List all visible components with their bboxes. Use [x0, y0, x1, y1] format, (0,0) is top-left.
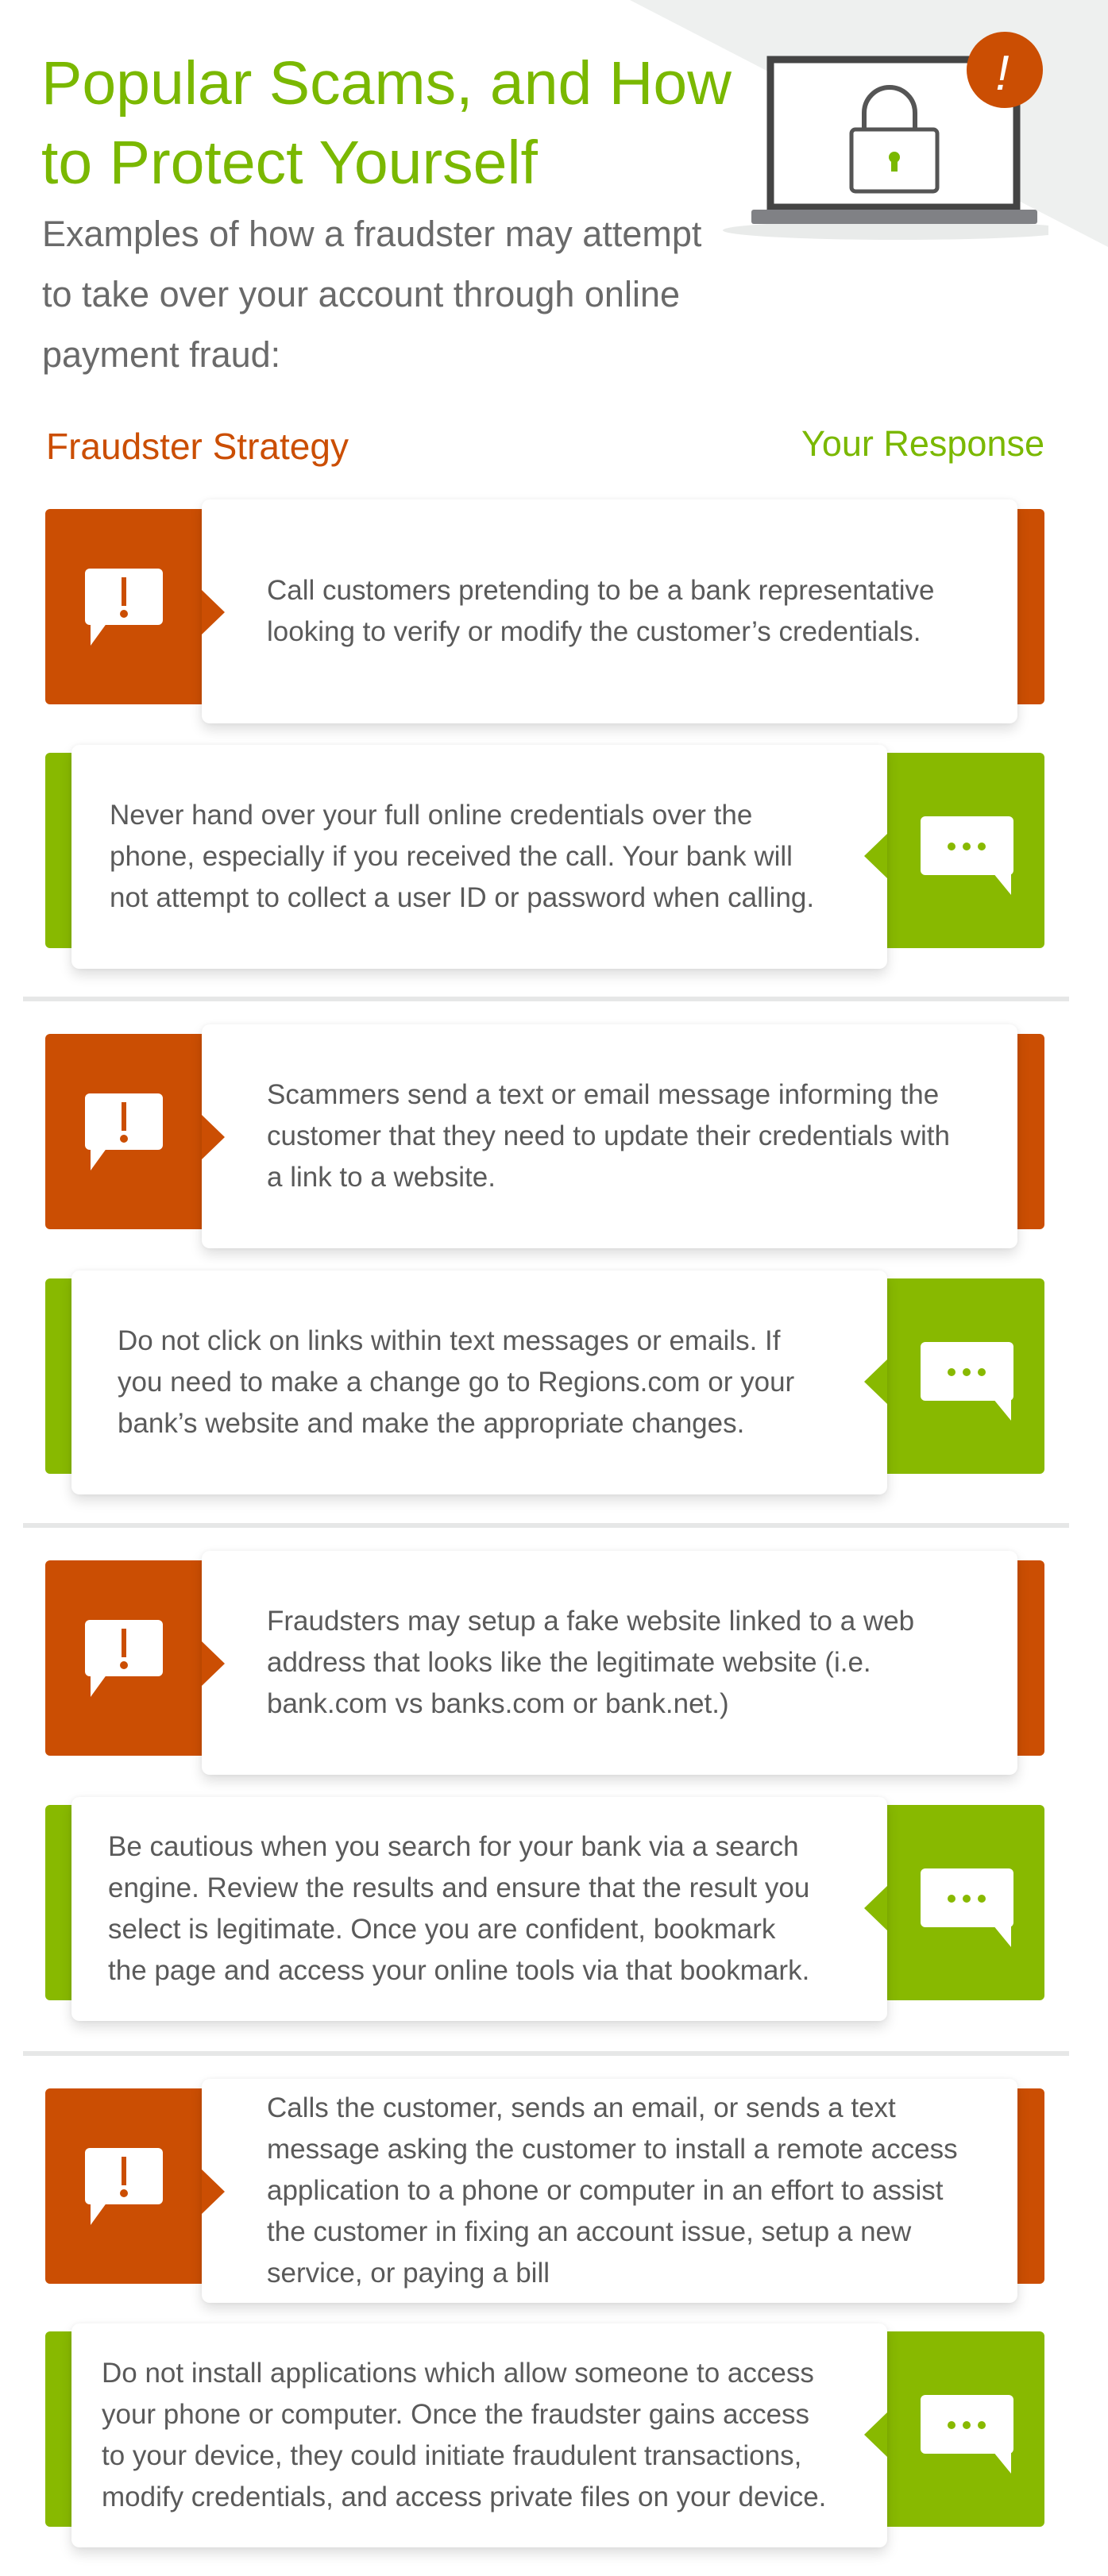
panel: response 1: not attempt to collect a user ID or password when calling. — [110, 882, 814, 913]
panel: response 4 — [45, 2323, 1044, 2558]
panel: strategy 4: the customer in fixing an account issue, setup a new — [267, 2216, 911, 2247]
panel: strategy 3: Fraudsters may setup a fake website linked to a web — [267, 1606, 914, 1637]
panel: strategy 4 — [45, 2078, 1044, 2313]
panel: response 4: your phone or computer. Once the fraudster gains access — [102, 2399, 809, 2430]
panel: strategy 3: bank.com vs banks.com or bank.net.) — [267, 1688, 729, 1719]
panel: strategy 2: Scammers send a text or email message informing the — [267, 1079, 939, 1110]
icon: laptop with lock: ! — [995, 46, 1010, 101]
icon: chat bubble — [864, 2395, 1013, 2474]
panel: strategy 3 — [45, 1550, 1044, 1785]
subtitle — [42, 214, 702, 375]
panel: strategy 1 — [45, 499, 1044, 734]
icon: alert bubble — [85, 1093, 225, 1170]
background triangle — [631, 0, 1108, 247]
section 1 — [45, 499, 1044, 979]
panel: strategy 1: looking to verify or modify the customer’s credentials. — [267, 616, 921, 647]
panel: response 4: modify credentials, and access private files on your device. — [102, 2482, 826, 2512]
section 4 — [45, 2078, 1044, 2558]
panel: strategy 3: address that looks like the legitimate website (i.e. — [267, 1647, 871, 1678]
panel: strategy 4: Calls the customer, sends an email, or sends a text — [267, 2092, 896, 2123]
panel: response 2: Do not click on links within text messages or emails. If — [118, 1325, 780, 1356]
section 2 — [45, 1024, 1044, 1505]
panel: response 2 — [45, 1270, 1044, 1505]
section 3 — [45, 1550, 1044, 2031]
panel: response 3: engine. Review the results and ensure that the result you — [108, 1872, 809, 1903]
title: to Protect Yourself — [41, 129, 538, 197]
panel: strategy 1: Call customers pretending to be a bank representative — [267, 575, 934, 606]
panel: response 3: the page and access your online tools via that bookmark. — [108, 1955, 809, 1986]
panel: response 2: bank’s website and make the appropriate changes. — [118, 1408, 744, 1439]
subtitle: Examples of how a fraudster may attempt — [42, 214, 701, 254]
panel: response 3 — [45, 1796, 1044, 2031]
panel: response 1: Never hand over your full online credentials over the — [110, 800, 752, 831]
panel: response 2: you need to make a change go to Regions.com or your — [118, 1367, 794, 1398]
title — [41, 49, 732, 197]
icon: laptop with lock — [723, 32, 1048, 240]
panel: strategy 2: customer that they need to update their credentials with — [267, 1120, 950, 1151]
panel: response 1 — [45, 744, 1044, 979]
subtitle: payment fraud: — [42, 334, 280, 375]
panel: response 4: to your device, they could initiate fraudulent transactions, — [102, 2440, 801, 2471]
icon: alert bubble — [85, 569, 225, 646]
icon: alert bubble — [85, 1620, 225, 1697]
icon: chat bubble — [864, 1868, 1013, 1947]
panel: strategy 2: a link to a website. — [267, 1162, 496, 1193]
heading: Your Response: Your Response — [801, 423, 1044, 464]
icon: chat bubble — [864, 816, 1013, 895]
panel: strategy 4: message asking the customer to install a remote access — [267, 2134, 958, 2165]
panel: response 1: phone, especially if you received the call. Your bank will — [110, 841, 793, 872]
heading: Fraudster Strategy: Fraudster Strategy — [46, 426, 349, 467]
icon: chat bubble — [864, 1342, 1013, 1421]
icon: alert bubble — [85, 2148, 225, 2225]
panel: strategy 2 — [45, 1024, 1044, 1259]
panel: response 3: Be cautious when you search for your bank via a search — [108, 1831, 799, 1862]
subtitle: to take over your account through online — [42, 274, 680, 314]
panel: strategy 4: application to a phone or computer in an effort to assist — [267, 2175, 944, 2206]
panel: response 3: select is legitimate. Once you are confident, bookmark — [108, 1914, 775, 1945]
title: Popular Scams, and How — [41, 49, 732, 118]
panel: response 4: Do not install applications which allow someone to access — [102, 2358, 814, 2389]
panel: strategy 4: service, or paying a bill — [267, 2258, 550, 2289]
